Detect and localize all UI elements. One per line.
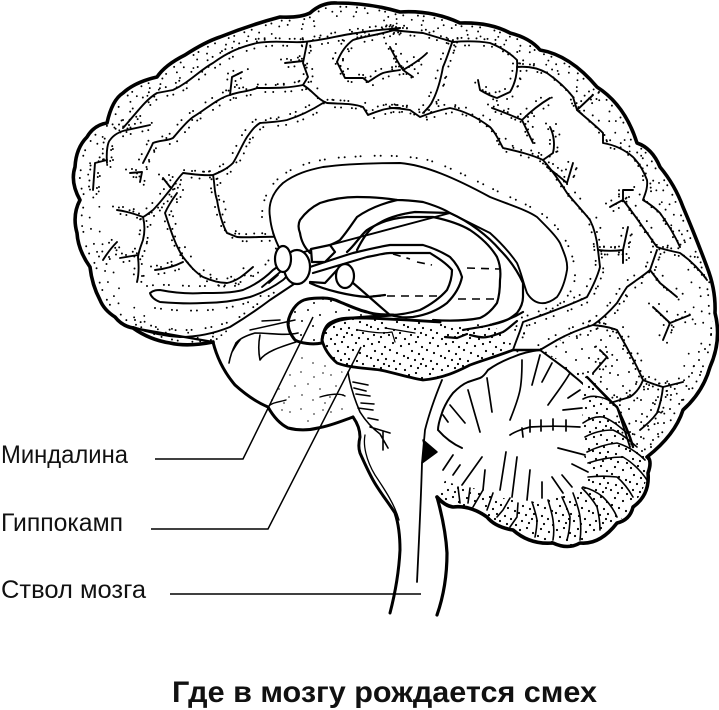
join between occipital lobe and cerebellum	[513, 350, 633, 447]
stipple following outer edge	[80, 7, 711, 452]
subcortical structure lines	[298, 197, 523, 338]
fornix upper strand	[312, 200, 397, 250]
brain illustration	[73, 3, 718, 615]
cerebellum outer stippled folia	[437, 350, 648, 545]
frontal band: cingulate strip	[150, 263, 292, 303]
amygdala	[288, 298, 393, 344]
label: amygdala: Миндалина	[1, 441, 128, 469]
leader line: brainstem	[170, 593, 421, 595]
lower fornix	[310, 283, 385, 297]
outer folia ribs	[458, 396, 647, 540]
title: Где в мозгу рождается смех	[172, 676, 597, 709]
cerebellum	[437, 350, 650, 546]
right edge of stem	[417, 380, 442, 582]
leader line: amygdala	[155, 317, 313, 459]
brainstem	[348, 372, 447, 615]
upper callosal contour	[298, 197, 523, 325]
cortex stipple along sulci	[80, 7, 713, 452]
leader line: hippocampus	[151, 347, 361, 529]
frontal inferior stipple	[270, 352, 352, 425]
midbrain stitch detail	[348, 372, 390, 450]
ovals: mammillary and thalamic bodies	[275, 245, 354, 288]
arbor fissures	[443, 355, 588, 500]
inner stipple along the corpus callosum arch	[135, 156, 575, 330]
left edge of stem	[353, 417, 400, 613]
label: brainstem: Ствол мозга	[1, 576, 146, 604]
dashed lines in thalamus	[373, 254, 499, 299]
temporal lobe: lower-right stipple	[513, 313, 715, 457]
outer contour of cerebrum	[73, 3, 718, 457]
cerebrum fill	[76, 3, 715, 457]
label: hippocampus: Гиппокамп	[1, 509, 123, 537]
fornix loop	[310, 245, 462, 317]
sulci lines	[93, 28, 707, 447]
hippocampus	[322, 318, 507, 380]
arbor vitae white centre	[438, 350, 588, 502]
corpus callosum white arch	[270, 163, 567, 303]
frontal inferior white lobe	[213, 320, 353, 430]
